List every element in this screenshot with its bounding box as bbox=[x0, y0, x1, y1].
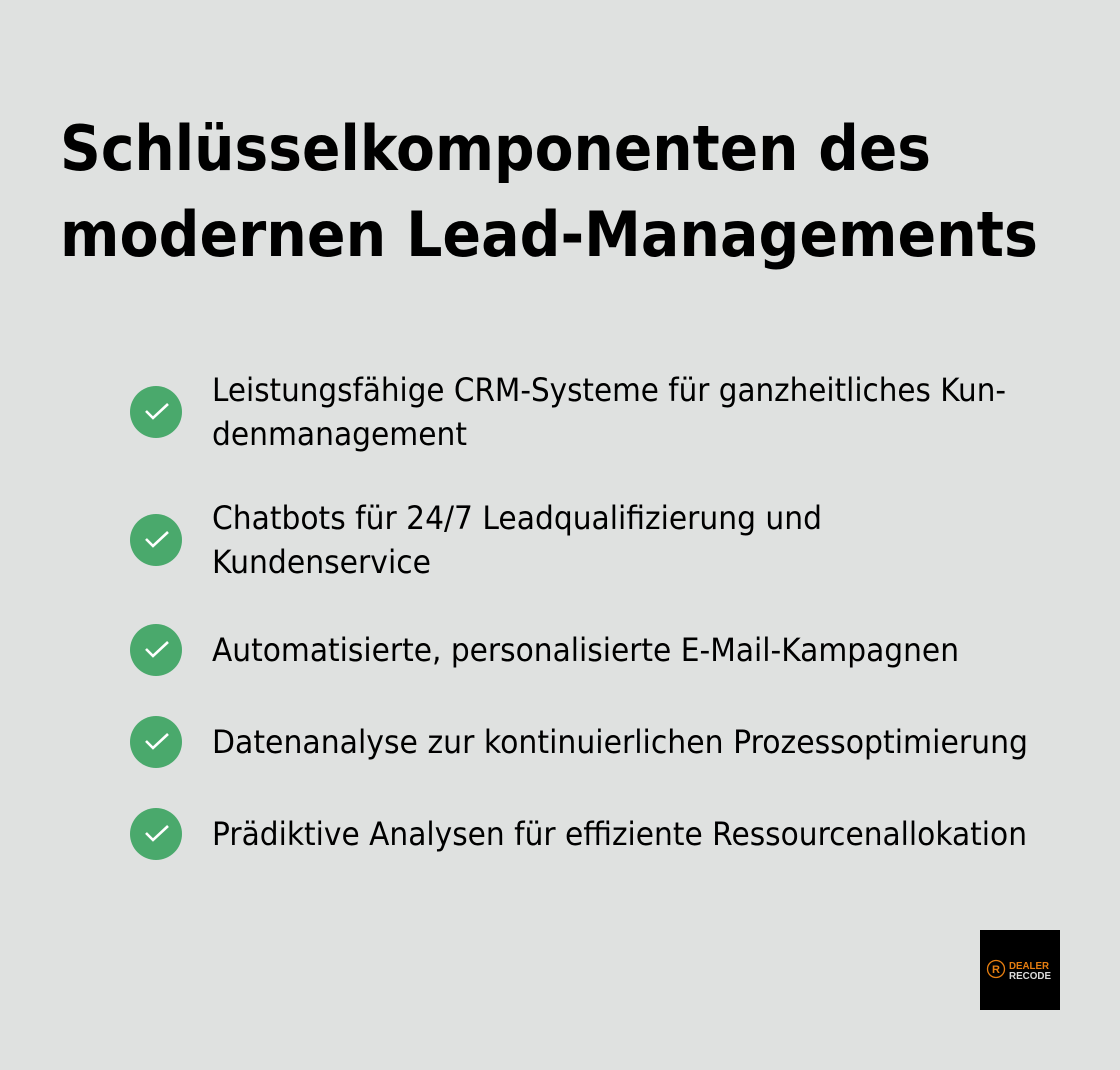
text: item 1: Leistungsfähige CRM-Systeme für ganzheitliches Kun- bbox=[212, 371, 1006, 409]
logo: Dealer Recode: RECODE bbox=[1009, 970, 1051, 982]
logo: Dealer Recode: DEALER bbox=[1009, 960, 1049, 972]
text: item 2: Chatbots für 24/7 Leadqualifizierung und bbox=[212, 499, 822, 537]
logo: Dealer Recode: R bbox=[992, 964, 1000, 976]
item 3: E-Mail bbox=[130, 624, 959, 676]
text: item 5: Prädiktive Analysen für effiziente Ressourcenallokation bbox=[212, 815, 1027, 853]
icon: check bbox=[130, 716, 182, 768]
text: item 1 bbox=[212, 371, 1006, 453]
title bbox=[60, 112, 1038, 271]
icon: check bbox=[130, 624, 182, 676]
text: item 4: Datenanalyse zur kontinuierlichen Prozessoptimierung bbox=[212, 723, 1028, 761]
title: Schlüsselkomponenten des bbox=[60, 112, 931, 185]
item 1: CRM bbox=[130, 371, 1006, 453]
text: item 1: denmanagement bbox=[212, 415, 467, 453]
item 2: Chatbots bbox=[130, 499, 822, 581]
checklist bbox=[130, 371, 1028, 860]
icon: check bbox=[130, 514, 182, 566]
item 5: Prädiktive Analysen bbox=[130, 808, 1027, 860]
logo: Dealer Recode bbox=[980, 930, 1060, 1010]
title: modernen Lead-Managements bbox=[60, 198, 1038, 271]
text: item 3: Automatisierte, personalisierte E-Mail-Kampagnen bbox=[212, 631, 959, 669]
text: item 2 bbox=[212, 499, 822, 581]
text: item 2: Kundenservice bbox=[212, 543, 431, 581]
item 4: Datenanalyse bbox=[130, 716, 1028, 768]
icon: check bbox=[130, 386, 182, 438]
icon: check bbox=[130, 808, 182, 860]
